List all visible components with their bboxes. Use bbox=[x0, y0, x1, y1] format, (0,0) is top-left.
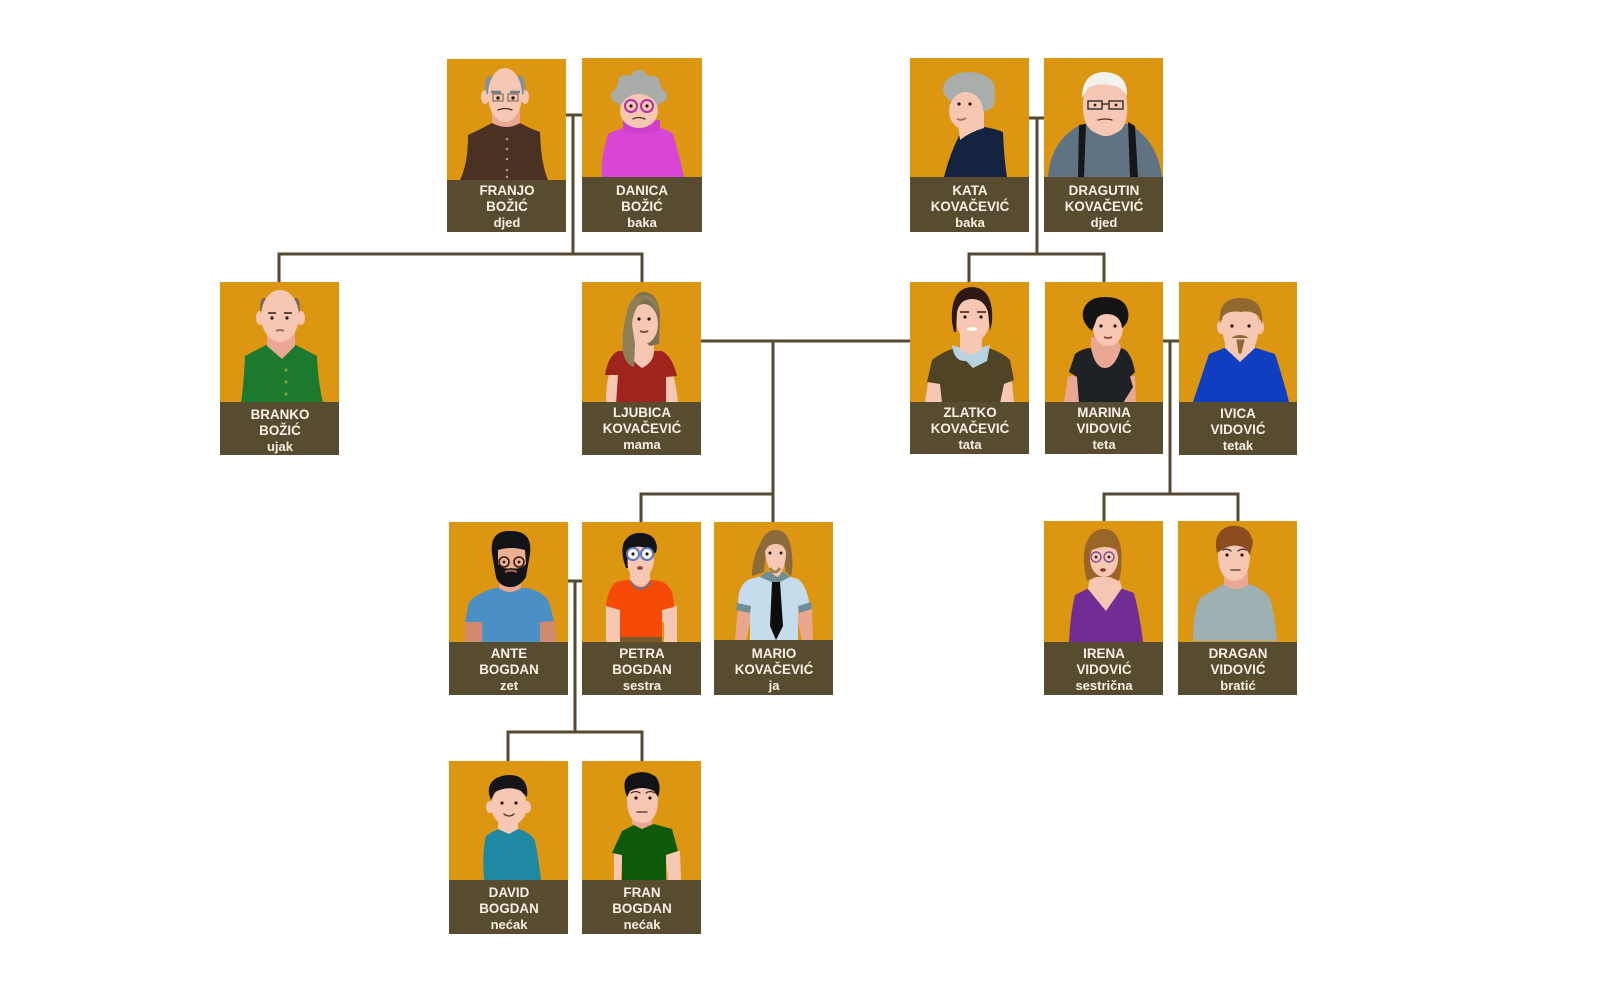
card: Danica Božić bbox=[582, 58, 702, 232]
portrait: Dragan bbox=[1193, 526, 1277, 641]
label: Ante: zet bbox=[500, 678, 519, 693]
card: Ante Bogdan bbox=[449, 522, 568, 695]
card: Ljubica Kovačević bbox=[582, 282, 701, 455]
label: Fran bbox=[582, 880, 701, 934]
label: Fran: FRAN bbox=[623, 885, 661, 900]
label: Ljubica: mama bbox=[623, 437, 662, 452]
card: Kata Kovačević bbox=[910, 58, 1029, 232]
label: Franjo: FRANJO bbox=[479, 183, 535, 198]
label: Dragan: VIDOVIĆ bbox=[1210, 662, 1266, 677]
card: Marina Vidović bbox=[1045, 282, 1163, 454]
portrait: Franjo bbox=[460, 68, 548, 180]
portrait: Dragutin bbox=[1048, 72, 1162, 177]
label: Petra bbox=[582, 642, 701, 695]
card: David Bogdan bbox=[449, 761, 568, 934]
portrait: Ivica bbox=[1193, 298, 1289, 402]
label: Irena: VIDOVIĆ bbox=[1076, 662, 1132, 677]
label: Branko bbox=[220, 402, 339, 455]
label: Ljubica: KOVAČEVIĆ bbox=[603, 421, 682, 436]
label: Ivica: VIDOVIĆ bbox=[1210, 422, 1266, 437]
label: Franjo: djed bbox=[494, 215, 520, 230]
label: Irena: IRENA bbox=[1083, 646, 1125, 661]
portrait: Branko bbox=[241, 290, 323, 403]
label: Zlatko: tata bbox=[958, 437, 982, 452]
label: Branko: BRANKO bbox=[251, 407, 309, 422]
portrait: Petra bbox=[606, 533, 677, 642]
label: Danica bbox=[582, 177, 702, 232]
label: Irena bbox=[1044, 642, 1163, 695]
portrait: Fran bbox=[612, 772, 681, 880]
portrait: Danica bbox=[602, 70, 684, 177]
label: Franjo bbox=[447, 180, 566, 232]
label: Marina bbox=[1045, 402, 1163, 454]
label: Dragutin: KOVAČEVIĆ bbox=[1065, 199, 1144, 214]
label: Kata bbox=[910, 177, 1029, 232]
label: Franjo: BOŽIĆ bbox=[486, 199, 528, 214]
label: Danica: DANICA bbox=[616, 183, 668, 198]
label: Petra: BOGDAN bbox=[612, 662, 672, 677]
card: Dragutin Kovačević bbox=[1044, 58, 1163, 232]
label: Petra: PETRA bbox=[619, 646, 665, 661]
card: Franjo Božić bbox=[447, 59, 566, 232]
label: Kata: KOVAČEVIĆ bbox=[931, 199, 1010, 214]
label: Branko: ujak bbox=[267, 439, 294, 454]
label: Marina: teta bbox=[1092, 437, 1116, 452]
label: Ivica: IVICA bbox=[1220, 406, 1256, 421]
portrait: Marina bbox=[1064, 297, 1136, 403]
label: Mario: KOVAČEVIĆ bbox=[735, 662, 814, 677]
label: David: DAVID bbox=[489, 885, 530, 900]
card: Fran Bogdan bbox=[582, 761, 701, 934]
label: Ante: ANTE bbox=[491, 646, 527, 661]
label: Kata: KATA bbox=[952, 183, 988, 198]
label: David: BOGDAN bbox=[479, 901, 539, 916]
label: Ante bbox=[449, 642, 568, 695]
label: Dragutin: DRAGUTIN bbox=[1069, 183, 1139, 198]
portrait: Zlatko bbox=[925, 287, 1014, 403]
label: Mario: ja bbox=[768, 678, 780, 693]
label: Branko: BOŽIĆ bbox=[259, 423, 301, 438]
label: Mario bbox=[714, 640, 833, 695]
label: Zlatko: KOVAČEVIĆ bbox=[931, 421, 1010, 436]
portrait: Ante bbox=[465, 531, 557, 642]
label: Marina: VIDOVIĆ bbox=[1076, 421, 1132, 436]
label: Dragutin: djed bbox=[1091, 215, 1117, 230]
label: Petra: sestra bbox=[623, 678, 662, 693]
label: Mario: MARIO bbox=[752, 646, 796, 661]
card: Dragan Vidović bbox=[1178, 521, 1297, 695]
label: Zlatko bbox=[910, 402, 1029, 454]
label: Dragutin bbox=[1044, 177, 1163, 232]
label: Kata: baka bbox=[955, 215, 986, 230]
label: Marina: MARINA bbox=[1077, 405, 1131, 420]
card: Petra Bogdan bbox=[582, 522, 701, 695]
card: Mario Kovačević bbox=[714, 522, 833, 695]
label: Dragan bbox=[1178, 642, 1297, 695]
card: Irena Vidović bbox=[1044, 521, 1163, 695]
label: Zlatko: ZLATKO bbox=[943, 405, 997, 420]
portrait: Mario bbox=[735, 530, 813, 640]
connector lines: family tree bbox=[279, 115, 1238, 760]
label: Ivica bbox=[1179, 402, 1297, 455]
label: Dragan: bratić bbox=[1220, 678, 1256, 693]
card: Zlatko Kovačević bbox=[910, 282, 1029, 454]
portrait: Irena bbox=[1069, 529, 1143, 642]
label: Ljubica: LJUBICA bbox=[613, 405, 671, 420]
label: Irena: sestrična bbox=[1075, 678, 1133, 693]
portrait: Ljubica bbox=[605, 292, 678, 404]
portrait: Kata bbox=[943, 72, 1007, 177]
label: Fran: BOGDAN bbox=[612, 901, 672, 916]
label: David bbox=[449, 880, 568, 934]
label: Danica: BOŽIĆ bbox=[621, 199, 663, 214]
label: Danica: baka bbox=[627, 215, 658, 230]
label: Ivica: tetak bbox=[1223, 438, 1254, 453]
label: David: nećak bbox=[491, 917, 528, 932]
card: Ivica Vidović bbox=[1179, 282, 1297, 455]
card: Branko Božić bbox=[220, 282, 339, 455]
label: Ante: BOGDAN bbox=[479, 662, 539, 677]
label: Fran: nećak bbox=[624, 917, 661, 932]
portrait: David bbox=[483, 775, 541, 880]
label: Ljubica bbox=[582, 402, 701, 455]
label: Dragan: DRAGAN bbox=[1209, 646, 1267, 661]
